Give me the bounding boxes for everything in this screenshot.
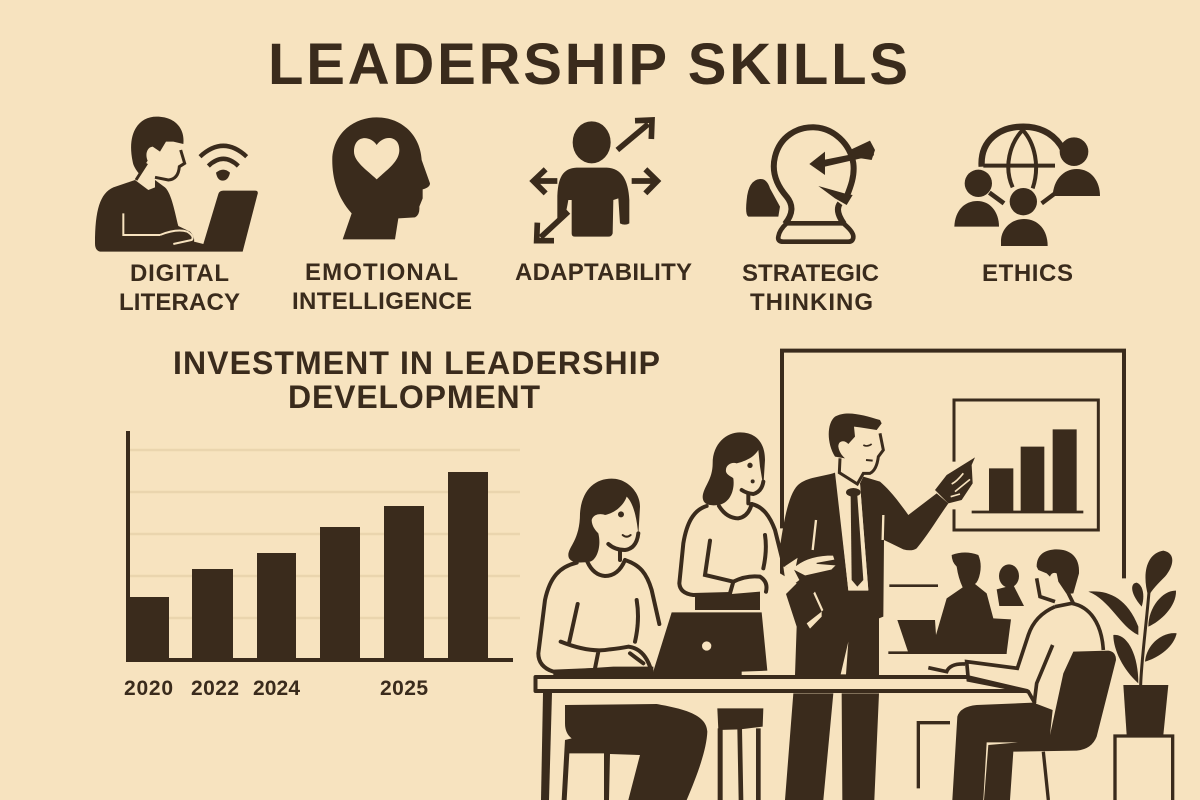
presenter bbox=[780, 413, 975, 800]
standing woman bbox=[679, 432, 783, 610]
icon: person with four arrows bbox=[533, 120, 657, 241]
seated woman bbox=[538, 479, 707, 800]
title: LEADERSHIP SKILLS bbox=[268, 32, 908, 97]
label: strategic thinking: STRATEGIC bbox=[742, 260, 879, 287]
chart heading: INVESTMENT IN LEADERSHIP bbox=[173, 345, 660, 381]
panel: ethics skill bbox=[954, 127, 1100, 287]
label: emotional intelligence bbox=[292, 259, 472, 315]
label: digital literacy: DIGITAL bbox=[130, 260, 229, 287]
panel: digital literacy skill bbox=[95, 117, 258, 316]
label: ethics: ETHICS bbox=[982, 260, 1073, 287]
chart heading bbox=[173, 345, 660, 415]
bar chart bbox=[124, 431, 520, 700]
label: emotional intelligence: INTELLIGENCE bbox=[292, 288, 472, 315]
panel: adaptability skill bbox=[515, 120, 692, 286]
icon: globe with three people bbox=[954, 127, 1100, 246]
label: emotional intelligence: EMOTIONAL bbox=[305, 259, 458, 286]
label: strategic thinking: THINKING bbox=[750, 289, 873, 316]
year labels bbox=[124, 677, 428, 700]
year labels: 2020 bbox=[124, 677, 173, 700]
whiteboard with chart bbox=[782, 351, 1124, 578]
table bbox=[536, 677, 1027, 800]
illustration: meeting scene bbox=[536, 351, 1177, 800]
icon: person at laptop with wifi bbox=[95, 117, 258, 252]
potted plant bbox=[1088, 551, 1177, 800]
chart heading: DEVELOPMENT bbox=[288, 379, 540, 415]
label: digital literacy bbox=[119, 260, 240, 316]
year labels: 2025 bbox=[380, 677, 428, 700]
stool bbox=[717, 708, 763, 800]
panel: emotional intelligence skill bbox=[292, 117, 472, 315]
year labels: 2022 bbox=[191, 677, 239, 700]
bars bbox=[126, 472, 488, 661]
icon: head with heart bbox=[332, 117, 430, 239]
year labels: 2024 bbox=[253, 677, 300, 700]
gesturing hand bbox=[783, 555, 837, 590]
label: digital literacy: LITERACY bbox=[119, 289, 240, 316]
label: strategic thinking bbox=[742, 260, 879, 316]
seated man on chair bbox=[918, 549, 1116, 800]
panel: strategic thinking skill bbox=[742, 127, 879, 316]
icon: chess head with arrow bbox=[746, 127, 875, 242]
background colleagues bbox=[888, 552, 1024, 653]
laptop bbox=[652, 612, 767, 677]
label: adaptability: ADAPTABILITY bbox=[515, 259, 692, 286]
